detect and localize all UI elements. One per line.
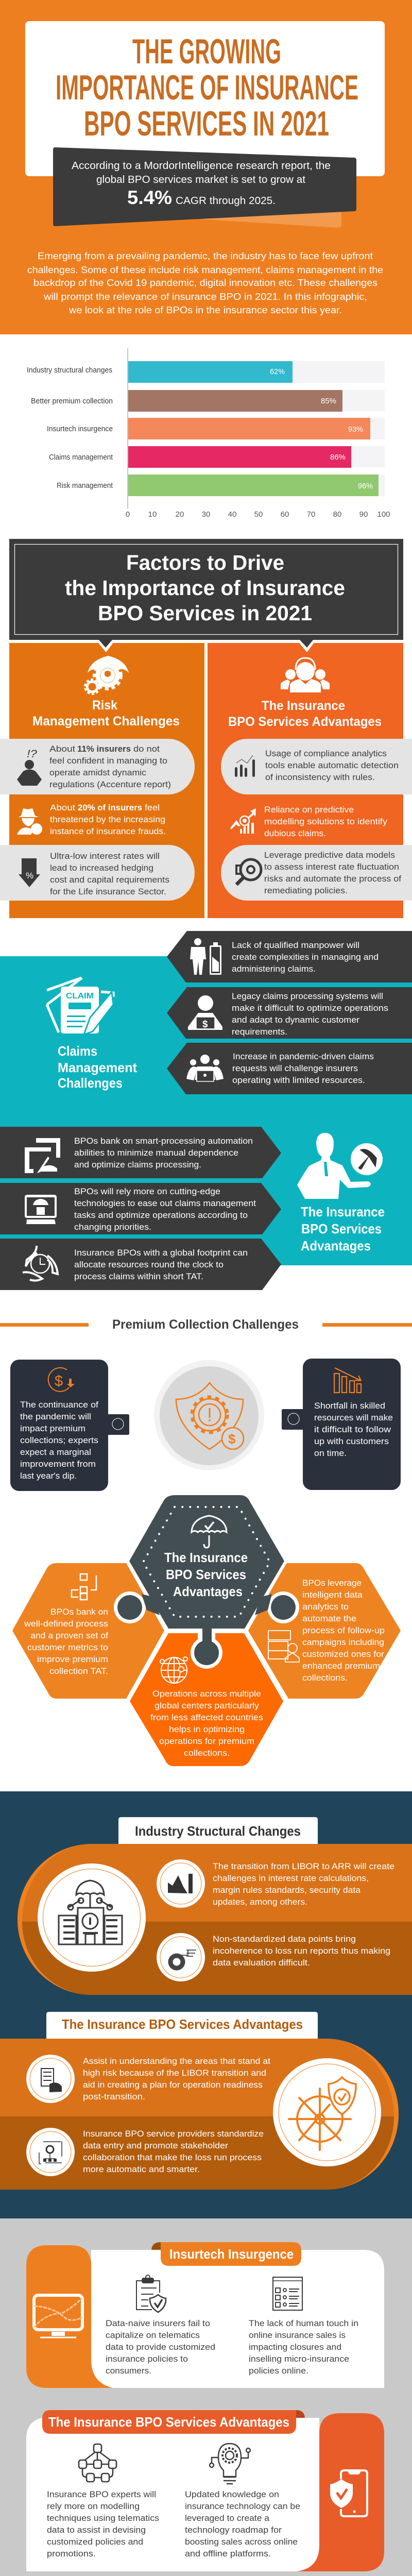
text: 11% insurers: do not	[133, 744, 160, 754]
panel: insurtech section background	[0, 2218, 412, 2576]
banner text	[72, 160, 331, 208]
factors title: the Importance of Insurance	[65, 576, 345, 600]
panel: insurance BPO advantages card	[26, 2410, 384, 2571]
challenge 2	[167, 987, 412, 1039]
panel: insurance BPO services advantages	[208, 640, 412, 918]
panel: premium advantages hexagons	[12, 1495, 401, 1766]
banner shadow strip	[197, 209, 341, 228]
text: BPOs bank on	[50, 1607, 108, 1617]
text: impact premium	[20, 1423, 85, 1433]
axis ticks: 90	[359, 510, 368, 519]
category labels: Better premium collection	[31, 397, 113, 405]
text: assist: post-transition.	[83, 2092, 145, 2102]
axis ticks: 40	[228, 510, 236, 519]
icon: monitor house umbrella	[25, 1195, 57, 1224]
text: updated knowledge	[185, 2489, 300, 2558]
text: 20% insurers	[50, 803, 166, 836]
text: tasks and optimize operations according to	[74, 1210, 248, 1220]
text: create complexities in managing and	[232, 952, 379, 962]
text: standardize: collaboration that make the loss run process	[83, 2153, 262, 2162]
panel: claims management	[0, 931, 412, 1290]
icon: falling chart	[157, 1859, 205, 1908]
bar values: 85%	[321, 397, 336, 405]
text	[20, 1400, 98, 1481]
icon: claim document	[47, 978, 113, 1035]
icon: workflow	[72, 1574, 96, 1600]
intro paragraph: will prompt the relevance of insurance BPO in 2021. In this infographic,	[43, 292, 367, 302]
pill 3	[0, 845, 195, 901]
icon: idea bulb gear	[210, 2444, 250, 2484]
centre heading: BPO Services	[166, 1567, 246, 1582]
text: BPOs bank on smart-processing automation	[74, 1136, 253, 1146]
text: requirements.	[232, 1027, 287, 1037]
centre heading: The Insurance	[164, 1550, 248, 1565]
text: collection TAT.	[49, 1666, 108, 1676]
text: interest rates: cost and capital requirements	[50, 875, 169, 885]
advantages heading: BPO Services Advantages	[228, 715, 382, 729]
text: modelling	[47, 2489, 159, 2558]
text: last year's dip.	[20, 1471, 77, 1481]
icon: umbrella with gears	[85, 656, 129, 694]
claims heading: Management	[58, 1060, 137, 1075]
text: up with customers	[314, 1436, 389, 1446]
text	[232, 991, 388, 1037]
intro paragraph: backdrop of the Covid 19 pandemic, digital innovation etc. These challenges	[33, 278, 377, 288]
text: modelling: data to assist in devising	[47, 2525, 146, 2535]
factors title: BPO Services in 2021	[98, 601, 312, 625]
tab heading: Industry Structural Changes	[135, 1823, 301, 1839]
text: 11% insurers: regulations (Accenture report)	[49, 779, 171, 789]
text: customer metrics to	[27, 1642, 108, 1652]
text: compliance analytics: of inconsistency with rules.	[265, 772, 375, 782]
panel: risk management challenges	[0, 640, 204, 918]
icon: businessman with umbrella	[297, 1133, 383, 1199]
text: Shortfall in skilled	[314, 1401, 385, 1411]
icon: automation signing	[25, 1138, 60, 1174]
text: and a proven set of	[30, 1631, 108, 1640]
text: operations for premium	[159, 1736, 254, 1746]
text: BPOs will rely more on cutting-edge	[74, 1187, 220, 1196]
text: process of follow-up	[302, 1625, 385, 1635]
text: global centers particularly	[154, 1701, 260, 1710]
icon: team around laptop	[186, 1055, 224, 1081]
text: human touch: inselling micro-insurance	[249, 2354, 349, 2364]
intro paragraph	[27, 251, 383, 315]
text: data-naive: data to provide customized	[106, 2342, 215, 2352]
icon: insured building	[38, 1863, 146, 1972]
tab heading: The Insurance BPO Services Advantages	[62, 2016, 303, 2032]
axis ticks: 60	[281, 510, 289, 519]
panel: industry structural changes	[0, 1791, 412, 2218]
axis ticks: 0	[126, 510, 130, 519]
icon: predictive eye	[230, 808, 256, 834]
heading: premium collection challenges	[0, 1317, 412, 1332]
text: Increase in pandemic-driven claims	[233, 1052, 374, 1061]
icon: policy list	[273, 2277, 302, 2310]
text: data-naive: insurance policies to	[106, 2354, 188, 2364]
text: automate the	[302, 1614, 356, 1623]
text: predictive data models: remediating policies.	[264, 886, 348, 895]
axis ticks	[126, 510, 390, 519]
text: predictive modelling: modelling solutions to identify	[264, 817, 388, 826]
text: updated knowledge: and offline platforms.	[185, 2549, 271, 2558]
hexagon: right	[248, 1563, 401, 1699]
text: collections; experts	[20, 1435, 98, 1445]
text: 20% insurers: instance of insurance frauds.	[50, 826, 166, 836]
icon: shield gear dollar circle	[154, 1360, 264, 1470]
axis ticks: 20	[176, 510, 184, 519]
axis ticks: 100	[377, 510, 390, 519]
icon: globe	[160, 1657, 187, 1683]
text: requests will challenge insurers	[232, 1063, 358, 1073]
text: predictive modelling: Reliance on predictive	[264, 805, 354, 815]
text: resources will make	[314, 1413, 393, 1422]
pill 1	[221, 739, 412, 794]
text: data-naive: Data-naive insurers fail to	[106, 2318, 210, 2328]
text: from less affected countries	[150, 1713, 263, 1722]
ribbon heading: The Insurance BPO Services Advantages	[48, 2414, 289, 2430]
intro paragraph: challenges. Some of these include risk management, claims management in the	[27, 265, 383, 275]
icon: dollar cycle	[48, 1368, 75, 1392]
advantages heading: The Insurance	[301, 1204, 385, 1219]
text: LIBOR transition: updates, among others.	[213, 1897, 307, 1907]
icon: claim document: CLAIM	[66, 992, 94, 1001]
icon: person with laptop: $	[202, 1019, 208, 1030]
ribbon heading	[42, 2410, 305, 2434]
icon: person with laptop	[188, 995, 222, 1030]
text: interest rates	[50, 851, 169, 896]
text: expect a marginal	[20, 1447, 91, 1457]
text: interest rates: Ultra-low interest rates will	[50, 851, 160, 861]
title	[56, 32, 358, 143]
icon: confused person: !?	[27, 748, 37, 760]
icon: analytics chart	[235, 755, 255, 777]
text	[232, 1052, 374, 1085]
text	[232, 940, 379, 974]
banner text: According to a MordorIntelligence research report, the	[72, 160, 331, 172]
text: non-standardized data: incoherence to loss run reports thus making	[213, 1946, 390, 1956]
text: on time.	[314, 1448, 347, 1458]
text: interest rates: for the Life insurance Sector.	[50, 887, 166, 896]
text: technologies to ease out claims management	[74, 1198, 256, 1208]
text: 11% insurers	[49, 744, 171, 789]
text: assist: high risk because of the LIBOR transition and	[83, 2068, 266, 2078]
text: LIBOR transition: challenges in interest rate calculations,	[213, 1873, 369, 1883]
text: well-defined process	[24, 1619, 108, 1629]
bar values	[270, 367, 373, 490]
panel: factors heading	[9, 539, 403, 640]
panel: header	[0, 0, 412, 334]
title card	[25, 21, 385, 176]
centre heading: Advantages	[173, 1584, 243, 1599]
text: abilities to minimize manual dependence	[74, 1148, 238, 1158]
bar values: 62%	[270, 367, 285, 376]
text: collections.	[184, 1748, 230, 1758]
axis ticks: 10	[148, 510, 157, 519]
text: modelling: Insurance BPO experts will	[47, 2489, 156, 2499]
text	[24, 1607, 108, 1676]
text: 11% insurers: operate amidst dynamic	[49, 768, 147, 777]
text: and adapt to dynamic customer	[232, 1015, 359, 1025]
panel: continuance card	[10, 1360, 129, 1491]
text: Legacy claims processing systems will	[232, 991, 383, 1001]
icon: clipboard shield	[136, 2275, 166, 2312]
bar values: 93%	[348, 425, 363, 434]
text: predictive data models	[264, 850, 401, 895]
tab heading	[118, 1817, 318, 1844]
icon: support agents	[281, 658, 330, 692]
icon: process gear	[26, 2128, 75, 2176]
centre heading	[164, 1550, 248, 1599]
text: assist: Assist in understanding the areas that stand at	[83, 2056, 270, 2066]
text: LIBOR transition: The transition from LIBOR to ARR will create	[213, 1861, 394, 1871]
title: THE GROWING	[132, 32, 281, 71]
bar values: 96%	[358, 482, 373, 490]
text: Insurance BPOs with a global footprint can	[74, 1248, 248, 1258]
icon: manpower battery	[190, 938, 221, 975]
hexagon: centre puzzle piece	[114, 1495, 299, 1669]
text: 11% insurers: feel confident in managing to	[49, 756, 167, 766]
claims heading: Challenges	[58, 1075, 123, 1091]
text: campaigns including	[302, 1637, 384, 1647]
text: interest rates: lead to increased hedging	[50, 863, 153, 873]
axis ticks: 70	[307, 510, 315, 519]
icon: percent down arrow: %	[26, 871, 33, 880]
text: it difficult to follow	[314, 1425, 391, 1434]
banner	[55, 149, 354, 224]
notch	[96, 640, 115, 652]
risk heading: Management Challenges	[32, 714, 180, 728]
text: assist	[83, 2056, 270, 2102]
text: modelling: techniques using telematics	[47, 2513, 159, 2523]
advantages heading: The Insurance	[262, 699, 345, 713]
claims heading	[58, 1043, 137, 1091]
text: administering claims.	[232, 964, 316, 974]
category labels: Industry structural changes	[27, 366, 112, 375]
text: standardize: more automatic and smarter.	[83, 2164, 200, 2174]
text: modelling: rely more on modelling	[47, 2501, 140, 2511]
icon: confused person	[17, 748, 42, 786]
pill 1	[0, 739, 195, 794]
icon: checklist hand	[26, 2055, 75, 2103]
text: predictive modelling	[264, 805, 388, 838]
text: modelling: promotions.	[47, 2549, 96, 2558]
panel: insurtech insurgence	[26, 2242, 384, 2388]
icon: helm and shield	[273, 2058, 381, 2166]
hexagon: left	[12, 1563, 164, 1699]
icon: network	[79, 2444, 116, 2482]
text: LIBOR transition	[213, 1861, 394, 1907]
notch	[297, 640, 316, 652]
text: human touch	[249, 2318, 358, 2376]
category labels: Claims management	[49, 453, 113, 462]
band	[0, 2039, 399, 2190]
text: improvement from	[20, 1459, 96, 1469]
text: data-naive: consumers.	[106, 2366, 151, 2376]
intro paragraph: we look at the role of BPOs in the insurance sector this year.	[68, 305, 342, 315]
text	[314, 1401, 393, 1458]
text: predictive modelling: dubious claims.	[264, 828, 326, 838]
axis ticks: 50	[254, 510, 263, 519]
text: Operations across multiple	[152, 1689, 261, 1699]
text: assist: aid in creating a plan for operation readiness	[83, 2080, 263, 2090]
text: human touch: online insurance sales is	[249, 2330, 346, 2340]
text: updated knowledge: Updated knowledge on	[185, 2489, 279, 2499]
icon: donut data	[157, 1933, 205, 1981]
category labels: Risk management	[57, 481, 113, 490]
text: 20% insurers: About	[50, 803, 75, 812]
banner text: CAGR through 2025.	[176, 195, 276, 207]
ribbon heading	[151, 2242, 301, 2266]
axis ticks: 80	[333, 510, 341, 519]
text	[74, 1136, 253, 1170]
text: The continuance of	[20, 1400, 98, 1410]
text: BPOs leverage	[302, 1578, 362, 1588]
text: predictive data models: risks and automate the process of	[264, 874, 401, 884]
advantages heading	[228, 699, 382, 729]
icon: chained monitor	[34, 2295, 82, 2337]
claims heading: Claims	[58, 1043, 97, 1059]
challenge 3	[167, 1043, 412, 1094]
text: compliance analytics	[265, 749, 399, 782]
text: make it difficult to optimize operations	[232, 1003, 388, 1013]
hexagon: bottom	[130, 1633, 283, 1766]
advantage 2	[0, 1183, 281, 1234]
icon: fraudster	[17, 808, 42, 835]
text: non-standardized data	[213, 1934, 390, 1968]
text: updated knowledge: technology roadmap for	[185, 2525, 282, 2535]
category labels: Insurtech insurgence	[47, 425, 113, 433]
text: LIBOR transition: margin rules standards, security data	[213, 1885, 361, 1895]
advantages heading: BPO Services	[301, 1221, 382, 1236]
intro paragraph: Emerging from a prevailing pandemic, the industry has to face few upfront	[38, 251, 373, 261]
category labels	[27, 366, 113, 490]
text: updated knowledge: leveraged to create a	[185, 2513, 270, 2523]
banner text: global BPO services market is set to grow at	[96, 174, 305, 185]
icon: shield gear dollar circle: $	[228, 1431, 236, 1447]
bar values: 86%	[330, 453, 346, 462]
text: modelling: customized policies and	[47, 2537, 143, 2547]
text: updated knowledge: insurance technology can be	[185, 2501, 300, 2511]
ribbon heading: Insurtech Insurgence	[169, 2246, 294, 2262]
risk heading	[32, 698, 180, 728]
text: 11% insurers: 11% insurers	[77, 744, 131, 754]
text: and optimize claims processing.	[74, 1160, 201, 1170]
text: allocate resources round the clock to	[74, 1260, 224, 1269]
text: predictive data models: Leverage predictive data models	[264, 850, 395, 860]
text: operating with limited resources.	[232, 1075, 365, 1085]
text: data-naive	[106, 2318, 215, 2376]
panel: shortfall card	[282, 1359, 401, 1490]
text: human touch: The lack of human touch in	[249, 2318, 358, 2328]
heading: premium collection challenges: Premium Collection Challenges	[112, 1317, 299, 1332]
text: 11% insurers: About	[49, 744, 75, 754]
text: collections.	[302, 1673, 348, 1683]
text: Lack of qualified manpower will	[232, 940, 359, 950]
text: human touch: impacting closures and	[249, 2342, 341, 2352]
text: compliance analytics: Usage of compliance analytics	[265, 749, 387, 758]
text: 20% insurers: feel	[145, 803, 160, 812]
advantage 3	[0, 1239, 281, 1290]
bar chart	[27, 348, 390, 519]
icon: umbrella check	[192, 1516, 227, 1548]
challenge 1	[167, 931, 412, 982]
text	[74, 1187, 256, 1232]
text: 20% insurers: threatened by the increasing	[50, 815, 165, 824]
advantages heading: Advantages	[301, 1238, 371, 1253]
factors title: Factors to Drive	[126, 551, 284, 574]
text	[302, 1578, 385, 1683]
icon: falling bars	[334, 1368, 361, 1393]
text: the pandemic will	[20, 1412, 91, 1421]
axis ticks: 30	[202, 510, 210, 519]
tab heading	[46, 2012, 318, 2039]
text	[74, 1248, 248, 1281]
text: standardize: data entry and promote stakeholder	[83, 2141, 228, 2150]
icon: dollar cycle: $	[55, 1373, 63, 1389]
text: non-standardized data: data evaluation difficult.	[213, 1958, 310, 1968]
text: human touch: policies online.	[249, 2366, 308, 2376]
text: compliance analytics: tools enable automatic detection	[265, 760, 399, 770]
text: updated knowledge: boosting sales across online	[185, 2537, 298, 2547]
advantages heading	[301, 1204, 385, 1253]
icon: search gear	[236, 859, 261, 885]
pill 3	[221, 845, 412, 901]
text: standardize: Insurance BPO service providers standardize	[83, 2129, 264, 2139]
factors title	[65, 551, 345, 625]
band	[18, 1844, 412, 1995]
text: analytics to	[302, 1602, 349, 1612]
icon: hands and clock	[23, 1246, 58, 1281]
text: improve premium	[37, 1654, 108, 1664]
text: standardize	[83, 2129, 264, 2174]
text: changing priorities.	[74, 1222, 151, 1232]
text: helps in optimizing	[169, 1724, 245, 1734]
risk heading: Risk	[92, 698, 117, 713]
banner text: 5.4%	[127, 187, 172, 208]
icon: percent down arrow	[19, 858, 40, 887]
text: non-standardized data: Non-standardized data points bring	[213, 1934, 356, 1944]
icon: checklist person	[268, 1631, 299, 1662]
text	[150, 1689, 263, 1758]
text: 20% insurers: 20% of insurers	[78, 803, 142, 812]
text: customized ones for	[302, 1649, 384, 1659]
text: enhanced premium	[302, 1661, 380, 1671]
text: process claims within short TAT.	[74, 1272, 203, 1281]
advantage 1	[0, 1127, 281, 1178]
text: intelligent data	[302, 1590, 363, 1600]
text: predictive data models: to assess interest rate fluctuation	[264, 862, 399, 872]
text: data-naive: capitalize on telematics	[106, 2330, 200, 2340]
icon: phone shield	[330, 2470, 367, 2516]
